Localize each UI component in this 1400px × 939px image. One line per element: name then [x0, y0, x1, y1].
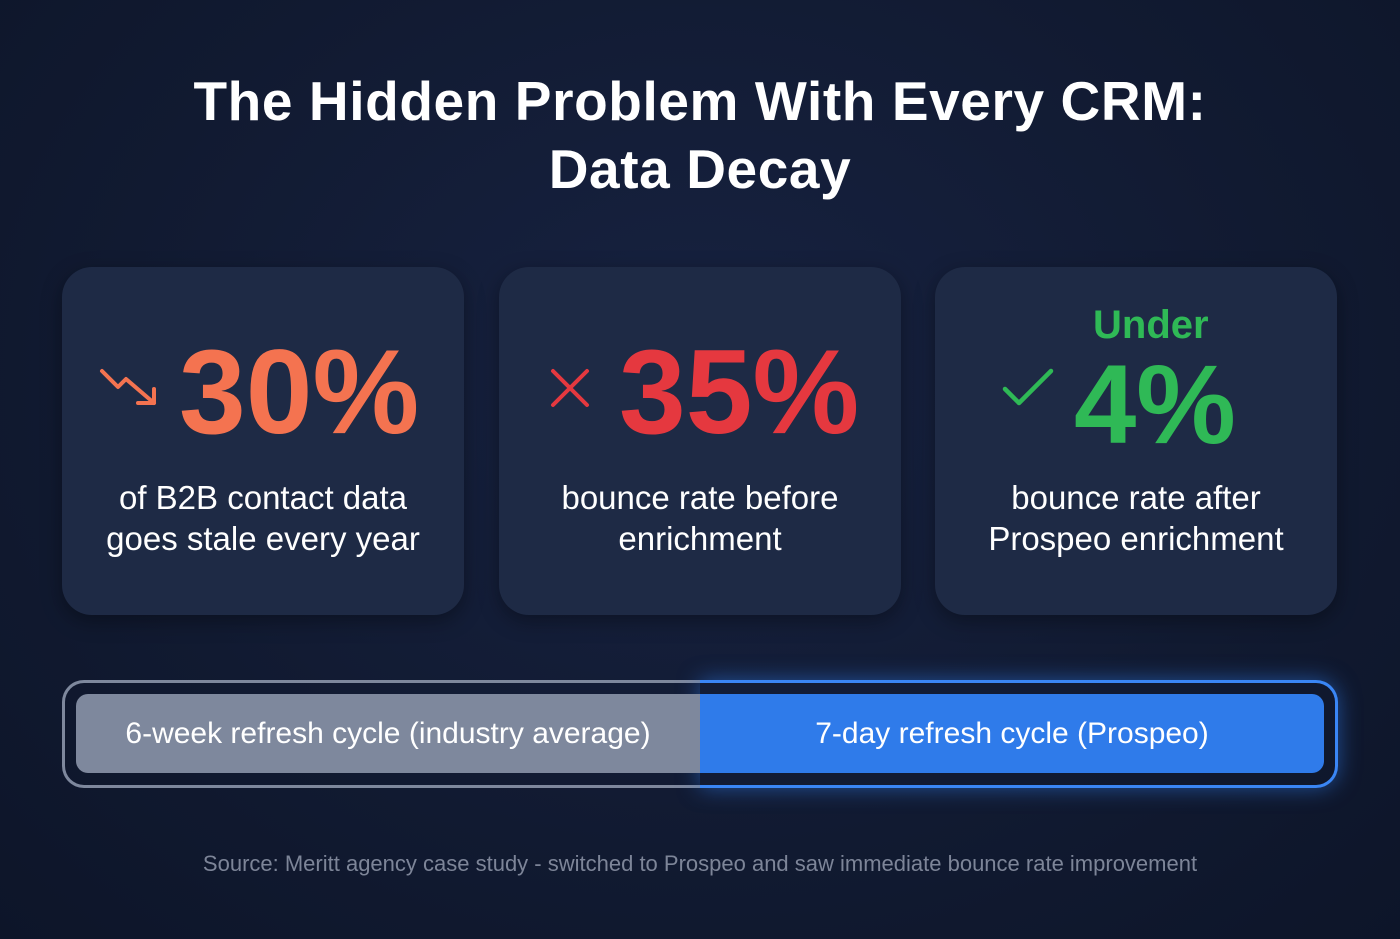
icon: trending down arrow — [100, 368, 156, 406]
stat: 4%: 4% — [1074, 342, 1236, 467]
panel: under 4% — [935, 267, 1337, 615]
description: of B2B contact data — [119, 479, 407, 516]
title: The Hidden Problem With Every CRM: — [193, 70, 1207, 132]
description: Prospeo enrichment — [988, 520, 1284, 557]
description — [988, 479, 1284, 557]
label: Under: Under — [1093, 303, 1209, 347]
stat: 35%: 35% — [619, 325, 859, 459]
description — [561, 479, 839, 557]
panel: 30% stale data — [62, 267, 464, 615]
stat: 30%: 30% — [179, 325, 419, 459]
icon: cross — [550, 368, 590, 408]
description — [106, 479, 420, 557]
title: Data Decay — [549, 138, 851, 200]
description: enrichment — [618, 520, 782, 557]
refresh cycle comparison bar — [62, 666, 1352, 802]
panel: 35% bounce rate — [499, 267, 901, 615]
description: bounce rate after — [1011, 479, 1261, 516]
segment: 7-day Prospeo: 7-day refresh cycle (Prospeo) — [815, 717, 1209, 750]
segment: 6-week industry average — [76, 694, 700, 773]
title — [193, 70, 1207, 200]
icon: checkmark — [1002, 368, 1054, 406]
description: goes stale every year — [106, 520, 420, 557]
source footnote: Source: Meritt agency case study - switched to Prospeo and saw immediate bounce rate improvement — [203, 851, 1197, 876]
segment: 7-day Prospeo — [700, 694, 1324, 773]
description: bounce rate before — [561, 479, 839, 516]
segment: 6-week industry average: 6-week refresh cycle (industry average) — [125, 717, 651, 750]
